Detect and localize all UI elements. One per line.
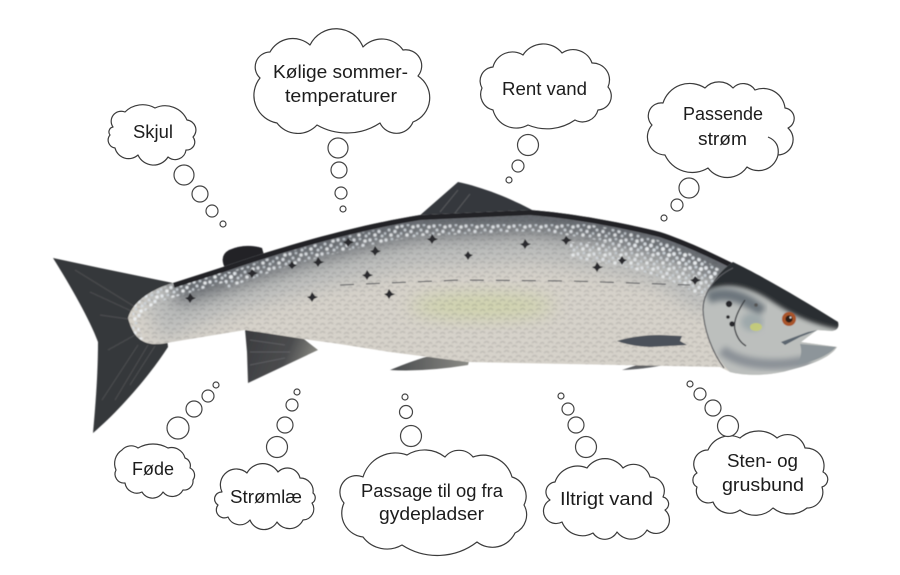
tail fin <box>53 258 173 433</box>
thought bubble: Passage til og fra gydepladser <box>340 394 527 555</box>
thought bubble: Strømlæ: Strømlæ <box>230 486 302 507</box>
bright scales on tail stalk <box>133 272 235 342</box>
thought bubble: Skjul <box>108 105 226 227</box>
thought bubble: Føde: Føde <box>132 458 174 479</box>
adipose fin <box>223 246 266 270</box>
gill cover line <box>703 268 733 368</box>
black spots <box>185 234 701 303</box>
pectoral fin <box>617 335 687 347</box>
upper jaw <box>781 330 818 345</box>
gill cover shading <box>722 350 810 364</box>
preopercle line <box>734 300 746 346</box>
lower jaw <box>796 344 836 365</box>
green belly patch <box>410 294 554 318</box>
thought bubble: Passende strøm: Passende <box>683 103 763 124</box>
thought bubble: Kølige sommertemperaturer: temperaturer <box>285 85 397 106</box>
rear ventral fin <box>622 364 664 370</box>
anal fin <box>245 329 318 383</box>
thought bubble: Passage til og fra gydepladser: gydepladser <box>379 503 484 524</box>
thought bubble: Passage til og fra gydepladser: Passage til og fra <box>361 480 504 501</box>
thought bubble: Sten- og grusbund: Sten- og <box>727 450 798 471</box>
scale texture <box>128 230 718 367</box>
thought bubble: Kølige sommertemperaturer <box>254 29 430 212</box>
thought bubble: Sten- og grusbund <box>687 381 828 515</box>
thought bubble: Føde <box>115 382 219 498</box>
pelvic fin <box>390 355 470 370</box>
thought bubble: Iltrigt vand: Iltrigt vand <box>560 488 653 509</box>
thought bubble: Passende strøm: strøm <box>698 128 747 149</box>
thought bubble: Kølige sommertemperaturer: Kølige sommer- <box>273 61 408 82</box>
thought bubble: Rent vand <box>480 44 611 183</box>
head spots <box>726 301 758 327</box>
thought bubble: Skjul: Skjul <box>133 121 173 142</box>
thought bubble: Iltrigt vand <box>543 393 669 539</box>
head <box>702 261 840 376</box>
eye <box>782 312 796 326</box>
thought bubble: Strømlæ <box>215 389 315 530</box>
body <box>127 209 732 372</box>
thought bubble: Sten- og grusbund: grusbund <box>722 474 804 495</box>
yellow cheek patch <box>750 323 762 331</box>
lateral line <box>340 280 690 285</box>
bright scales along back <box>225 224 735 288</box>
dorsal fin <box>418 182 534 222</box>
thought bubble: Rent vand: Rent vand <box>502 78 587 99</box>
fish illustration <box>53 182 850 433</box>
dark back line <box>172 209 732 288</box>
thought bubble: Passende strøm <box>647 82 794 221</box>
